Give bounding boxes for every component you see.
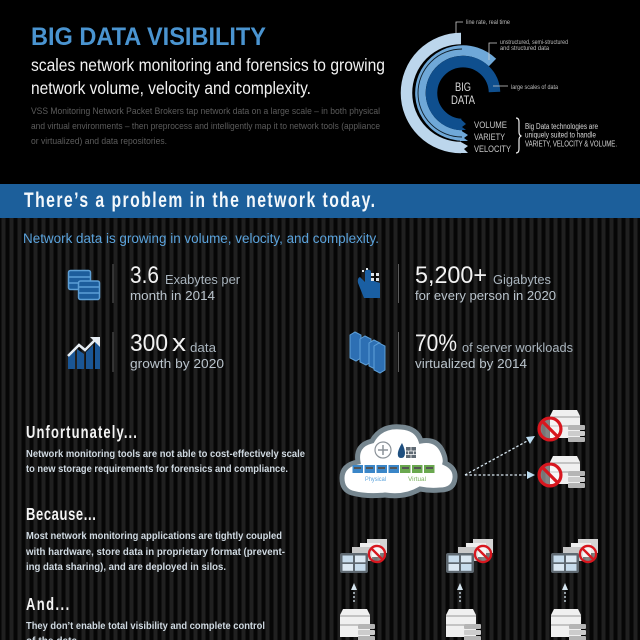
icon: blocked storage upper [539, 410, 585, 442]
callout: ring annotations [456, 19, 568, 91]
callout: ring annotations: line rate, real time [466, 19, 510, 26]
text block: unfortunately: Unfortunately... [26, 423, 137, 443]
icon: server columns [350, 332, 385, 373]
silo 2 [446, 539, 493, 640]
subtitle: network volume, velocity and complexity. [31, 78, 311, 98]
text block: because: with hardware, store data in proprietary format (prevent- [25, 546, 285, 558]
stat: data growth: growth by 2020 [130, 356, 224, 371]
stat: gigabytes: Gigabytes [493, 272, 551, 287]
chart: big data rings [406, 38, 512, 155]
section heading: Network data is growing in volume, velocity, and complexity. [23, 231, 379, 246]
stat: data growth: 300 [130, 330, 168, 357]
icon: router [375, 442, 391, 458]
text block: and [26, 595, 265, 640]
striped lower background [0, 218, 640, 640]
stat: exabytes: month in 2014 [130, 288, 215, 303]
diagram: network cloud: Virtual [408, 476, 427, 483]
stat: gigabytes [358, 262, 556, 303]
intro paragraph: VSS Monitoring Network Packet Brokers tap network data on a large scale – in both physical [31, 106, 380, 117]
text block: because: ing data sharing), and are deployed in silos. [26, 561, 226, 573]
arrow: to lower storage [465, 471, 535, 479]
outer ring: velocity [406, 38, 468, 153]
title: BIG DATA VISIBILITY [31, 23, 266, 51]
stat: virtualized workloads: 70% [415, 330, 457, 357]
stat: exabytes [68, 262, 241, 303]
ring legend: VOLUME [474, 120, 507, 131]
inner ring: volume [432, 62, 494, 130]
text block: and: And... [26, 595, 69, 615]
stat: gigabytes: 5,200+ [415, 262, 487, 289]
text block: because: Most network monitoring applications are tightly coupled [26, 530, 282, 542]
callout: ring annotations: and structured data [500, 45, 549, 52]
ring centre label: BIG [455, 82, 471, 94]
callout: big data technologies [516, 118, 617, 153]
diagram: network cloud [342, 427, 455, 496]
stat: virtualized workloads: virtualized by 2014 [415, 356, 527, 371]
banner [0, 184, 640, 218]
icon: touch hand [358, 268, 380, 298]
arrow: to upper storage [465, 436, 535, 475]
stat: exabytes: 3.6 [130, 262, 159, 289]
banner: There’s a problem in the network today. [24, 188, 375, 212]
intro paragraph: or virtualized) and data repositories. [31, 136, 167, 147]
subtitle: scales network monitoring and forensics to growing [31, 55, 385, 75]
stat: virtualized workloads [350, 330, 573, 373]
stat: data growth [68, 330, 224, 372]
ring legend: VARIETY [474, 132, 506, 143]
callout: ring annotations: large scales of data [511, 84, 558, 91]
icon: firewall flame [398, 443, 416, 458]
subtitle [31, 55, 385, 98]
intro paragraph: and virtual environments – then preprocess and intelligently map it to network tools (appliance [31, 121, 380, 132]
middle ring: variety [418, 49, 492, 141]
stat: data growth: x [172, 330, 186, 357]
text block: unfortunately: to new storage requirements for forensics and compliance. [26, 463, 288, 475]
switch ports: physical [352, 465, 399, 473]
text block: unfortunately: Network monitoring tools are not able to cost-effectively scale [26, 448, 305, 460]
ring legend [474, 120, 512, 155]
text block: because [25, 505, 285, 573]
switch ports: virtual [400, 465, 434, 473]
stat: exabytes: Exabytes per [165, 272, 241, 287]
ring centre label [451, 82, 475, 107]
icon: blocked storage lower [539, 456, 585, 488]
ring centre label: DATA [451, 95, 475, 107]
stat: data growth: data [190, 340, 217, 355]
text block: and: They don’t enable total visibility and complete control [26, 620, 265, 632]
silo 1 [340, 539, 387, 640]
stat: gigabytes: for every person in 2020 [415, 288, 556, 303]
icon: servers [68, 270, 100, 300]
text block: unfortunately [26, 423, 305, 475]
intro paragraph [31, 106, 380, 147]
stat: virtualized workloads: of server workloads [462, 340, 573, 355]
icon: growth chart [68, 337, 100, 369]
callout: big data technologies: uniquely suited to handle [525, 130, 596, 140]
silo 3 [551, 539, 598, 640]
text block: because: Because... [26, 505, 96, 525]
cloud labels: Physical [365, 476, 386, 483]
callout: big data technologies: Big Data technologies are [525, 122, 598, 131]
callout: ring annotations: unstructured, semi-structured [500, 39, 568, 46]
ring legend: VELOCITY [474, 144, 512, 155]
